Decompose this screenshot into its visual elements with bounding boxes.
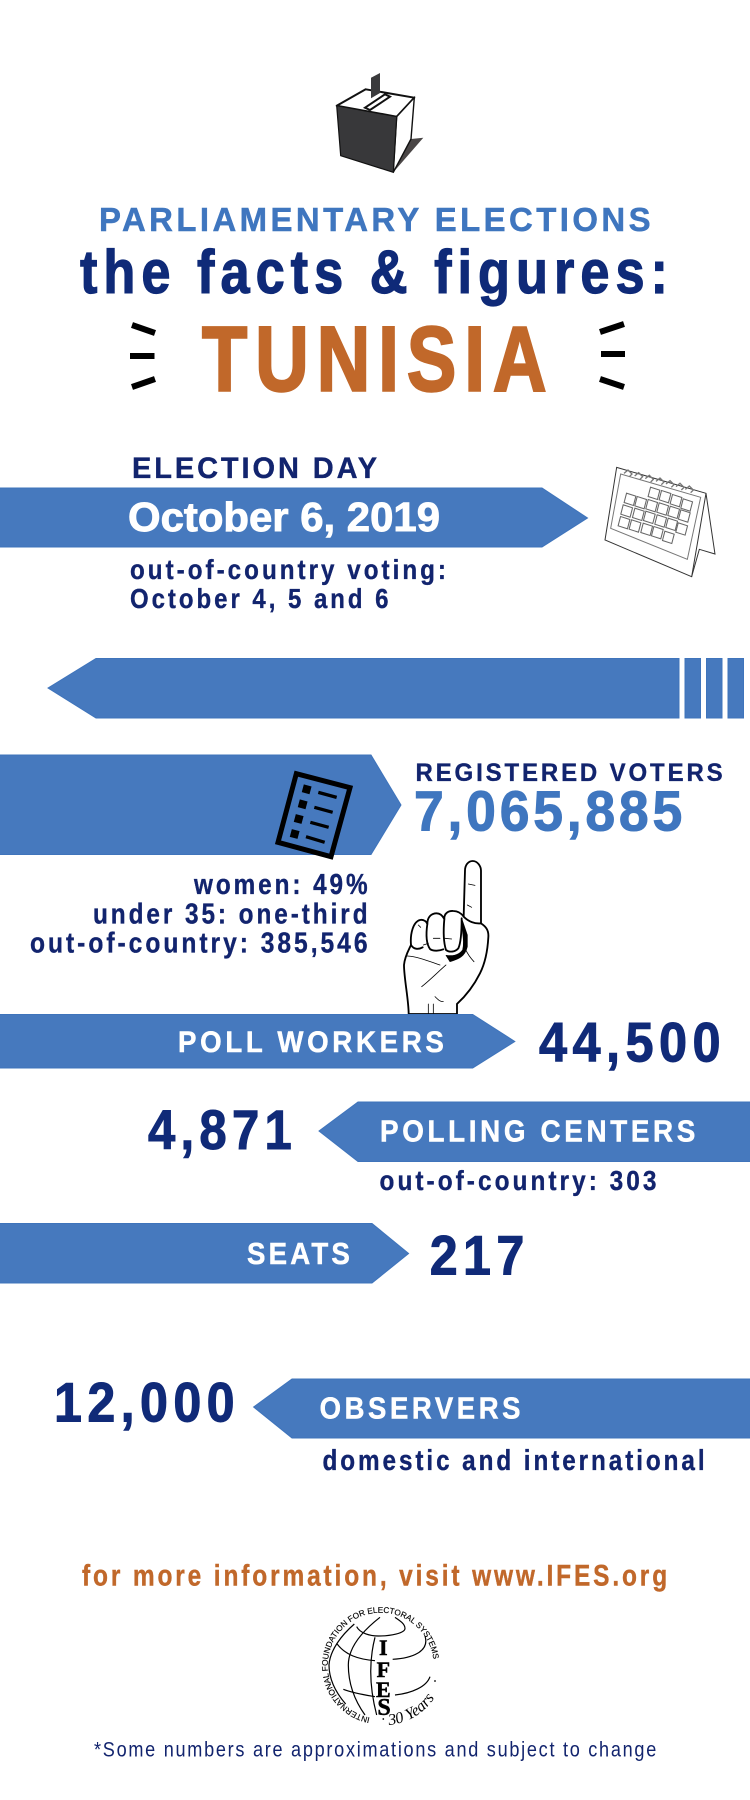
- date: October 6, 2019: October 6, 2019: [128, 494, 440, 540]
- logo: IFES vertical letters: I: [379, 1635, 388, 1660]
- arrow: seats banner: [0, 1224, 409, 1283]
- arrow: election day banner: [0, 488, 588, 547]
- logo: IFES globe: [322, 1607, 439, 1725]
- arrow: pencil shape banner: [48, 658, 744, 718]
- logo: IFES vertical letters: S: [377, 1695, 391, 1721]
- icon: ballot list document: [278, 774, 350, 857]
- heading: election day: ELECTION DAY: [132, 452, 380, 485]
- number: seats total: 217: [430, 1224, 530, 1287]
- panel: observers: [54, 1370, 750, 1477]
- icon: left accent dashes: [130, 325, 155, 387]
- text: footnote: *Some numbers are approximations and subject to change: [94, 1739, 658, 1762]
- label: poll workers: POLL WORKERS: [178, 1026, 448, 1059]
- text: women share: women: 49%: [193, 869, 370, 901]
- text: out-of-country polling centers: out-of-country: 303: [380, 1165, 660, 1196]
- text: under 35 share: under 35: one-third: [93, 898, 370, 930]
- logo: IFES vertical letters: F: [377, 1657, 390, 1682]
- arrow: polling centers banner: [319, 1102, 750, 1162]
- heading: Tunisia: TUNISIA: [202, 308, 554, 410]
- number: registered voters total: 7,065,885: [414, 780, 686, 844]
- number: poll workers total: 44,500: [539, 1011, 726, 1074]
- logo: IFES vertical letters: [376, 1635, 391, 1721]
- panel: polling centers: [148, 1098, 750, 1196]
- arrow: registered voters banner: [0, 755, 401, 854]
- panel: election day: [0, 452, 715, 614]
- panel: seats: [0, 1224, 530, 1287]
- number: polling centers total: 4,871: [148, 1098, 297, 1161]
- logo: 30 years: 30 Years: [388, 1694, 434, 1725]
- calendar day grid: [618, 487, 693, 543]
- text: out-of-country voting: out-of-country voting:: [130, 554, 449, 585]
- text: out-of-country voting dates: October 4, 5 and 6: [130, 583, 392, 614]
- panel: registered voters: [0, 755, 726, 960]
- logo: IFES vertical letters: E: [376, 1677, 391, 1702]
- text: out-of-country registered: out-of-country: 385,546: [30, 928, 370, 960]
- number: observers total: 12,000: [54, 1370, 240, 1434]
- icon: desk calendar: [605, 467, 715, 577]
- logo: globe lines: [329, 1617, 430, 1715]
- icon: ballot box: [337, 73, 423, 172]
- label: seats: SEATS: [247, 1237, 353, 1271]
- label: observers: OBSERVERS: [320, 1391, 524, 1425]
- title block: [80, 202, 674, 410]
- heading: registered voters: REGISTERED VOTERS: [416, 759, 726, 787]
- icon: right accent dashes: [600, 324, 625, 387]
- logo: circular organisation name: INTERNATIONAL FOUNDATION FOR ELECTORAL SYSTEMS: [322, 1607, 439, 1723]
- label: polling centers: POLLING CENTERS: [380, 1114, 699, 1148]
- heading: parliamentary elections: PARLIAMENTARY ELECTIONS: [99, 202, 654, 239]
- icon: hand with raised index finger: [404, 861, 488, 1014]
- arrow: observers banner: [254, 1379, 750, 1438]
- arrow: poll workers banner: [0, 1014, 515, 1068]
- panel: poll workers: [0, 1011, 726, 1074]
- logo: separator dots: [382, 1680, 436, 1720]
